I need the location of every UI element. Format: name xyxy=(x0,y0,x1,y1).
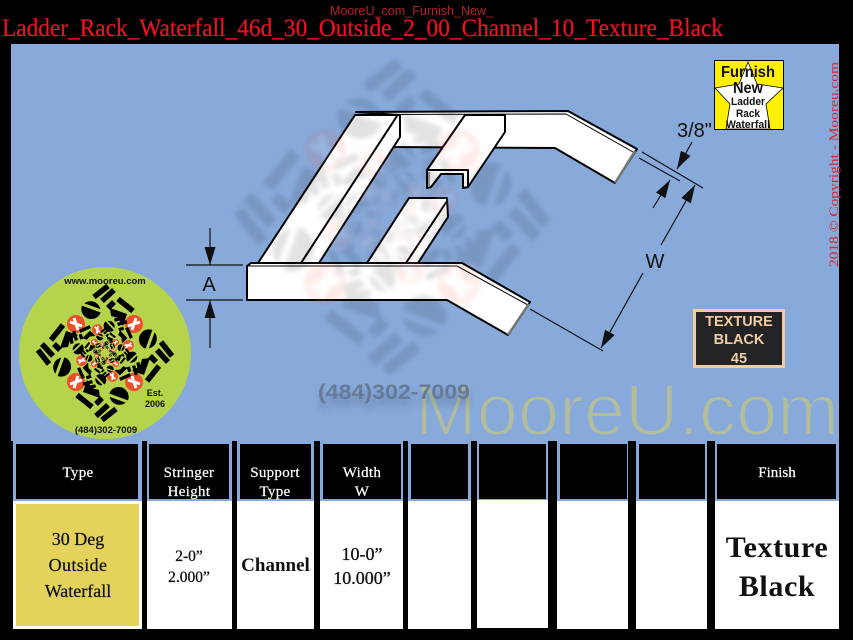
dimension W: W xyxy=(646,251,665,273)
round logo: Est. xyxy=(147,388,163,398)
empty column 7 xyxy=(557,441,628,629)
finish plate: 45 xyxy=(731,351,747,367)
badge: furnish new: Ladder xyxy=(731,96,766,108)
lower channel stub xyxy=(367,198,448,263)
phone number: (484)302-7009 xyxy=(320,388,470,411)
empty column 8 xyxy=(636,441,707,629)
round logo: 2006 xyxy=(145,399,165,409)
column: width: 10.000” xyxy=(333,568,391,588)
MooreU.com wordmark: MooreU.com xyxy=(415,371,839,451)
badge: furnish new: Furnish xyxy=(721,64,775,81)
round logo: (484)302-7009 xyxy=(75,425,137,436)
column: type: Type xyxy=(63,465,94,481)
ladder rack drawing xyxy=(247,111,637,335)
badge: furnish new: New xyxy=(733,80,764,97)
main title: Ladder_Rack_Waterfall_46d_30_Outside_2_00_Channel_10_Texture_Black xyxy=(2,15,723,42)
round logo: www.mooreu.com xyxy=(63,276,146,287)
column: type: Outside xyxy=(49,555,107,575)
column: finish: Black xyxy=(739,570,815,603)
column: finish: Texture xyxy=(726,531,828,564)
empty column 5 xyxy=(408,441,471,629)
column: finish xyxy=(715,441,839,629)
round logo xyxy=(19,267,191,439)
finish plate: BLACK xyxy=(714,332,765,348)
column: support type: Support xyxy=(250,465,300,481)
copyright vertical text: 2018 © Copyright - Mooreu.com xyxy=(826,62,841,267)
column: support type xyxy=(237,441,314,629)
badge: furnish new: Waterfall xyxy=(726,119,770,131)
badge: furnish new: Rack xyxy=(736,108,761,120)
column: type: Waterfall xyxy=(45,581,111,601)
column: type: 30 Deg xyxy=(52,529,104,549)
column: type xyxy=(13,441,142,629)
badge: furnish new xyxy=(714,60,784,131)
watermark logo xyxy=(238,63,546,371)
finish plate xyxy=(694,310,784,367)
small file title: MooreU_com_Furnish_New_ xyxy=(330,3,494,18)
dimension A xyxy=(186,228,243,348)
column: width: Width xyxy=(343,465,381,481)
column: finish: Finish xyxy=(758,465,796,481)
column: width: W xyxy=(355,484,370,500)
dimension 3/8 inch xyxy=(639,120,712,208)
upper channel stub xyxy=(427,115,505,188)
column: support type: Channel xyxy=(241,555,310,576)
column: support type: Type xyxy=(260,484,291,500)
column: width xyxy=(320,441,403,629)
empty column 6 xyxy=(477,441,548,628)
column: stringer height: Stringer xyxy=(164,465,214,481)
dimension A: A xyxy=(202,274,216,296)
column: stringer height: 2-0” xyxy=(175,548,203,565)
column: stringer height: Height xyxy=(168,484,211,500)
column: stringer height xyxy=(147,441,232,629)
near-side channel support xyxy=(258,115,400,263)
dimension 3/8 inch: 3/8" xyxy=(677,120,712,142)
specification table xyxy=(13,441,839,629)
column: stringer height: 2.000” xyxy=(168,569,210,586)
near stringer xyxy=(247,263,530,335)
finish plate: TEXTURE xyxy=(705,314,773,330)
far stringer xyxy=(356,111,637,183)
phone number: (484)302-7009 xyxy=(318,381,470,404)
column: width: 10-0” xyxy=(342,544,383,564)
dimension W xyxy=(530,185,695,351)
blue drawing panel xyxy=(11,44,839,441)
